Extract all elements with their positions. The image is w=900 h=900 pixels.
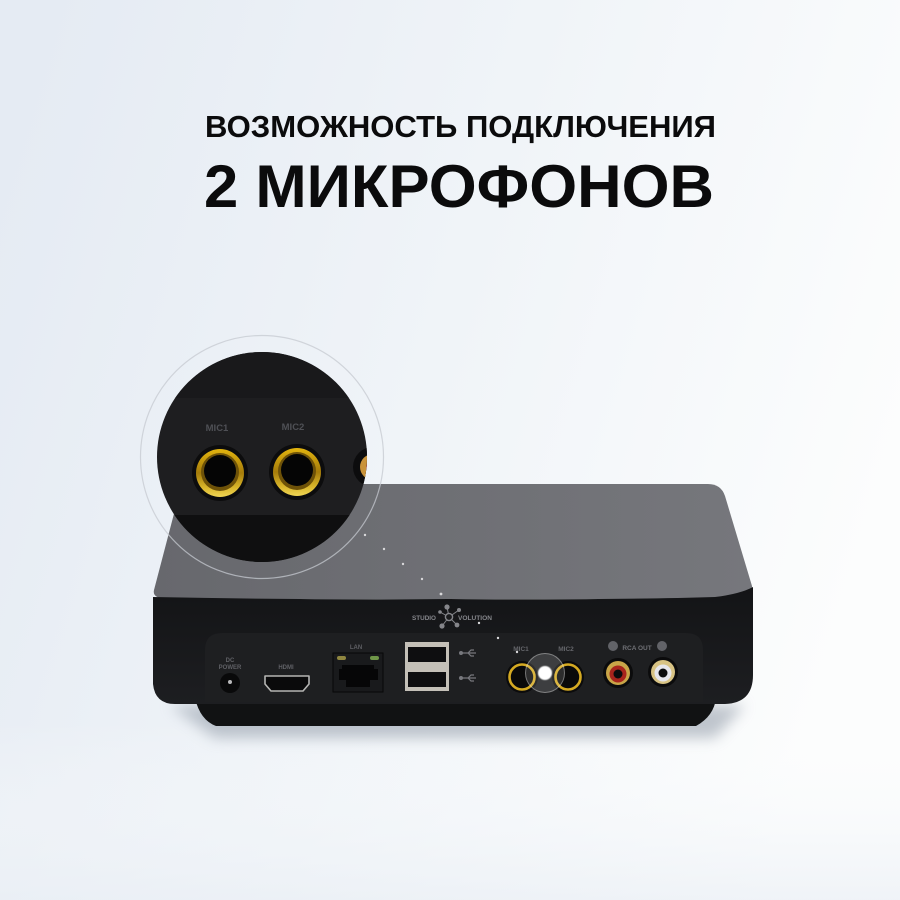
jack: rca partial	[353, 448, 367, 484]
port: usb	[405, 642, 476, 691]
port: hdmi	[265, 665, 309, 691]
dotted leader line	[364, 534, 518, 653]
port: dc power: DC	[226, 658, 235, 664]
port: lan	[333, 645, 383, 692]
port: lan: LAN	[350, 645, 362, 651]
port: dc power: POWER	[219, 665, 242, 671]
rear port panel	[205, 633, 703, 702]
device: karaoke media box	[153, 484, 753, 738]
icon: usb symbols	[460, 650, 476, 681]
device front face	[153, 587, 753, 704]
device shadow	[170, 705, 745, 738]
port: mic1 and mic2	[506, 646, 584, 693]
callout: magnified microphone jacks	[140, 336, 393, 578]
logo: studio evolution	[412, 604, 492, 629]
port: rca out	[603, 641, 678, 688]
label: mic2: MIC2	[282, 422, 304, 433]
title: 2 МИКРОФОНОВ	[204, 153, 714, 220]
logo: studio evolution: STUDIO	[412, 615, 436, 622]
magnifier lens	[157, 352, 367, 562]
highlight marker	[526, 654, 564, 692]
port: mic1 and mic2: MIC1	[513, 646, 529, 653]
title: ВОЗМОЖНОСТЬ ПОДКЛЮЧЕНИЯ	[205, 109, 716, 144]
label: mic1: MIC1	[206, 423, 229, 434]
device foot	[195, 698, 716, 726]
title	[204, 109, 716, 220]
logo: studio evolution: VOLUTION	[458, 615, 492, 622]
jack: mic2	[269, 444, 325, 500]
port: dc power	[219, 658, 242, 693]
magnifier outer ring	[140, 336, 384, 578]
port: mic1 and mic2: MIC2	[558, 646, 574, 653]
device top surface	[154, 484, 752, 599]
port: hdmi: HDMI	[278, 665, 294, 671]
jack: mic1	[192, 445, 248, 501]
port: rca out: RCA OUT	[622, 645, 652, 652]
